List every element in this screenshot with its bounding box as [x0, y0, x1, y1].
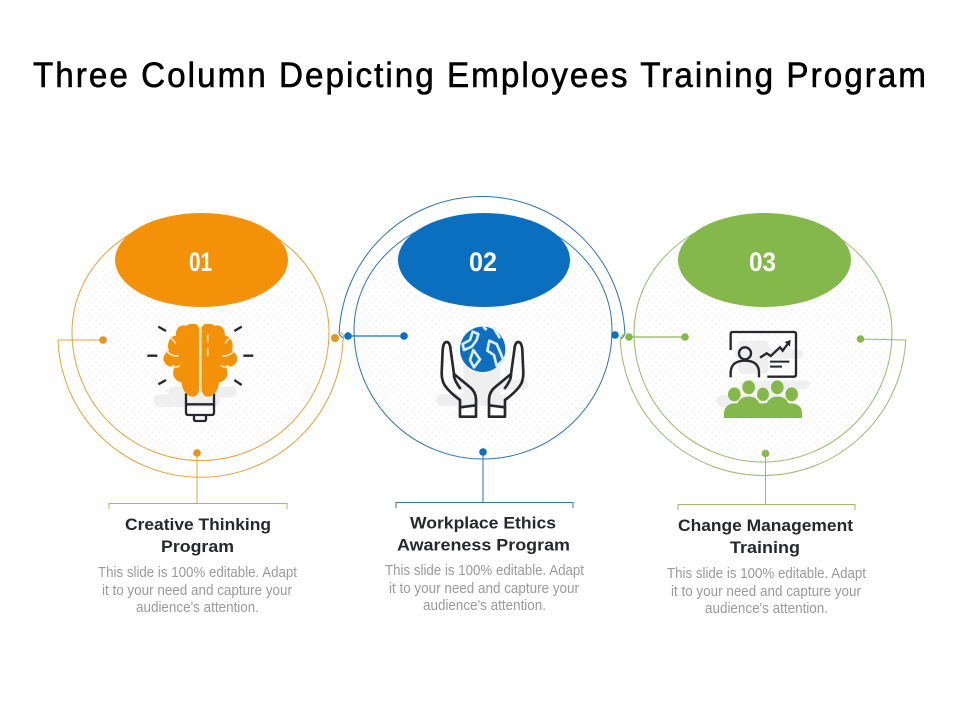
description: This slide is 100% editable. Adapt: [98, 564, 298, 581]
outer arc with connector: [58, 332, 344, 477]
heading: [125, 515, 271, 556]
badge 01: 01: [189, 247, 212, 277]
description: audience's attention.: [423, 597, 546, 614]
description: it to your need and capture your: [389, 580, 579, 597]
left and right dots: [99, 334, 339, 344]
inner dotted circle: [72, 215, 329, 460]
icon: presenter and audience: [717, 332, 809, 418]
connector to label: [109, 449, 287, 509]
left connector and side dots: [344, 331, 619, 340]
badge 02: [398, 213, 570, 307]
description: [667, 565, 867, 617]
panel: column 2 workplace ethics: [339, 197, 625, 614]
badge 01: [115, 213, 288, 307]
left connector and side dots: [625, 333, 864, 343]
heading: Creative Thinking: [125, 515, 271, 534]
heading: Training: [730, 538, 800, 557]
description: [385, 562, 585, 614]
outer arc: [339, 197, 625, 339]
heading: Program: [161, 537, 234, 556]
description: This slide is 100% editable. Adapt: [667, 565, 867, 582]
heading: [397, 514, 570, 554]
heading: [678, 516, 853, 557]
icon: hands holding globe: [437, 327, 528, 417]
badge 03: [678, 213, 851, 307]
description: audience's attention.: [705, 600, 828, 617]
description: audience's attention.: [136, 599, 259, 616]
connector to label: [678, 450, 855, 510]
panel: column 3 change management: [620, 213, 906, 617]
heading: Workplace Ethics: [410, 514, 556, 532]
description: [98, 564, 298, 616]
heading: Change Management: [678, 516, 853, 535]
inner dotted circle: [354, 215, 612, 459]
description: it to your need and capture your: [102, 582, 292, 599]
panel: column 1 creative thinking: [58, 213, 344, 616]
outer arc with connector: [620, 333, 906, 475]
icon: brain light bulb: [147, 325, 253, 421]
inner dotted circle: [634, 215, 892, 462]
badge 03: 03: [749, 247, 776, 277]
title: Three Column Depicting Employees Training Program: [33, 56, 926, 95]
badge 02: 02: [469, 247, 497, 277]
description: This slide is 100% editable. Adapt: [385, 562, 585, 579]
heading: Awareness Program: [397, 536, 570, 554]
connector to label: [396, 448, 573, 508]
description: it to your need and capture your: [671, 583, 861, 600]
